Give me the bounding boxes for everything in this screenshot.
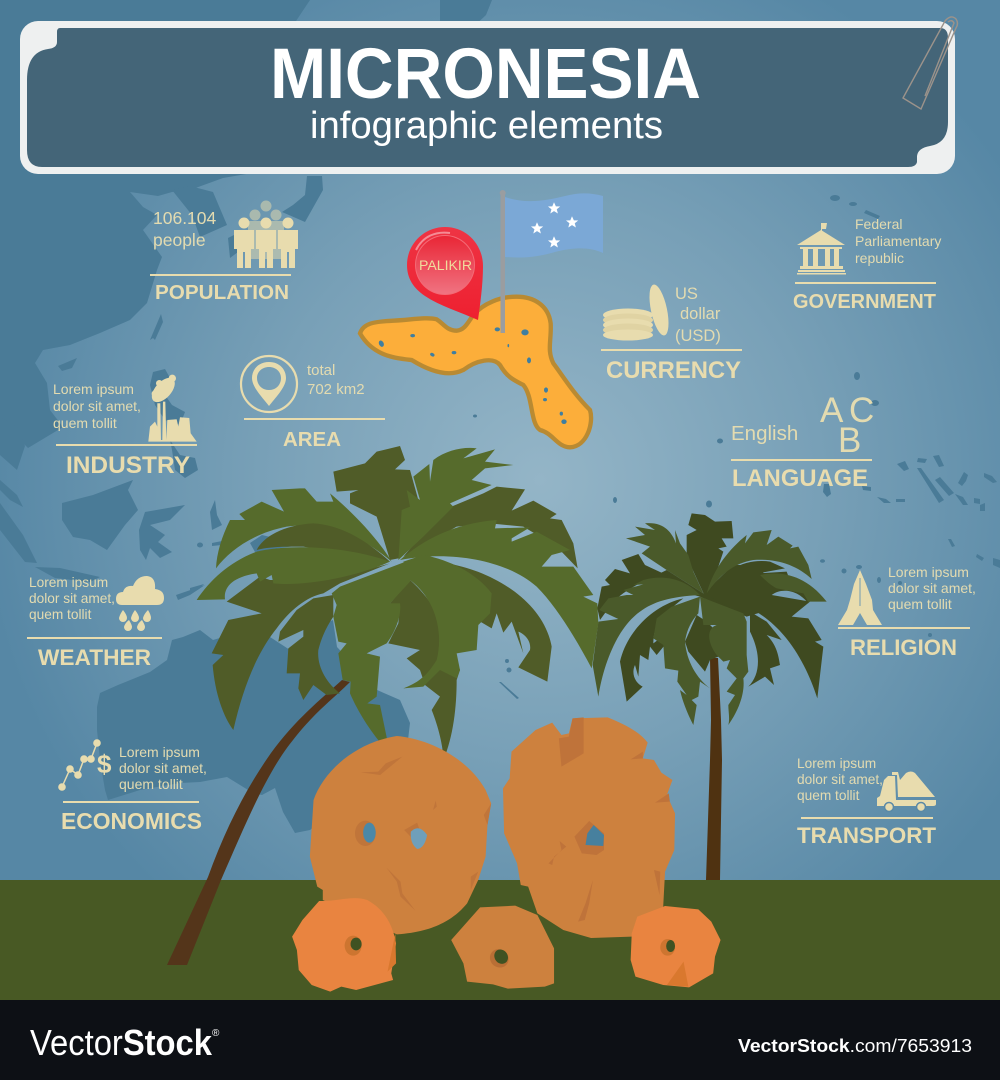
flag cloth: [505, 193, 603, 257]
weather text: Lorem ipsum: [29, 575, 108, 590]
transport block: [797, 756, 936, 848]
currency block: [601, 283, 742, 384]
currency label: CURRENCY: [606, 357, 741, 384]
religion text: dolor sit amet,: [888, 580, 976, 596]
ground: [0, 880, 1000, 1000]
flag on pole: [500, 190, 603, 333]
area text: total: [307, 362, 335, 379]
area text: 702 km2: [307, 381, 365, 398]
flag stars: [532, 203, 577, 247]
small palm fronds: [593, 513, 827, 725]
VectorStock image id: VectorStock .com/7653913: [738, 1036, 972, 1056]
economics text: dolor sit amet,: [119, 760, 207, 776]
stone: large right: [503, 717, 675, 938]
registered mark: ®: [212, 1028, 220, 1039]
icon: dump truck: [877, 772, 936, 812]
capital pin: [407, 227, 483, 320]
government text: Federal: [855, 216, 902, 232]
title banner: [20, 17, 958, 174]
currency text: US: [675, 285, 698, 303]
icon: letters ABC: [820, 391, 874, 460]
banner dark panel: [27, 28, 948, 167]
religion block: [838, 564, 976, 660]
world map silhouette: [0, 0, 1000, 833]
weather label: WEATHER: [38, 645, 151, 670]
large palm tree: [167, 446, 598, 965]
currency text: dollar: [680, 305, 721, 323]
industry text: dolor sit amet,: [53, 398, 141, 414]
transport text: dolor sit amet,: [797, 772, 883, 787]
religion text: Lorem ipsum: [888, 564, 969, 580]
language text: English: [731, 422, 798, 445]
economics text: quem tollit: [119, 776, 183, 792]
pin body: [407, 227, 483, 320]
icon: paperclip: [903, 17, 958, 109]
title text: MICRONESIA: [270, 35, 701, 114]
icon: letters ABC: B: [838, 421, 861, 460]
economics block: [58, 739, 207, 834]
religion text: quem tollit: [888, 596, 952, 612]
large palm trunk: [167, 680, 350, 965]
population block: [150, 200, 298, 304]
religion label: RELIGION: [850, 635, 957, 660]
stone: small left: [292, 898, 396, 992]
icon: praying hands: [838, 570, 882, 625]
weather text: dolor sit amet,: [29, 591, 115, 606]
icon: people: [234, 200, 298, 268]
banner white frame: [20, 21, 955, 174]
economics label: ECONOMICS: [61, 808, 202, 834]
stone: small middle: [451, 906, 554, 989]
icon: letters ABC: A: [820, 391, 844, 430]
government text: Parliamentary: [855, 233, 941, 249]
map of Micronesia island: [360, 297, 591, 447]
subtitle text: infographic elements: [310, 105, 663, 147]
industry label: INDUSTRY: [66, 452, 190, 479]
government text: republic: [855, 250, 904, 266]
small palm tree: [593, 513, 827, 880]
large palm fronds: [197, 446, 598, 760]
icon: rain cloud: [116, 576, 164, 631]
capital name: PALIKIR: [419, 257, 472, 273]
flag pole: [500, 193, 505, 333]
industry text: quem tollit: [53, 415, 117, 431]
transport text: Lorem ipsum: [797, 756, 876, 771]
area block: [241, 356, 385, 451]
icon: factory: [148, 374, 197, 442]
industry text: Lorem ipsum: [53, 381, 134, 397]
population unit: people: [153, 230, 206, 250]
currency text: (USD): [675, 327, 721, 345]
stone: small right: [631, 906, 721, 987]
icon: coins: [603, 283, 672, 340]
transport label: TRANSPORT: [797, 823, 936, 848]
economics text: Lorem ipsum: [119, 744, 200, 760]
transport text: quem tollit: [797, 788, 860, 803]
VectorStock logo text: VectorStock: [30, 1022, 213, 1063]
small palm trunk: [706, 658, 722, 880]
government block: [793, 216, 941, 313]
language label: LANGUAGE: [732, 465, 868, 492]
footer band: [0, 1000, 1000, 1080]
government label: GOVERNMENT: [793, 291, 936, 313]
population label: POPULATION: [155, 281, 289, 304]
icon: parliament building: [797, 223, 846, 274]
population figures: 106.104: [153, 208, 217, 228]
weather block: [27, 575, 164, 670]
icon: map pin in circle: [241, 356, 297, 412]
area label: AREA: [283, 428, 341, 451]
icon: letters ABC: C: [849, 391, 874, 430]
industry block: [53, 374, 197, 479]
weather text: quem tollit: [29, 607, 92, 622]
stone: large left: [310, 736, 491, 934]
language block: [731, 391, 874, 492]
stone money group: [292, 717, 721, 992]
icon: chart with dollar: $: [97, 749, 112, 779]
icon: chart with dollar: [58, 739, 112, 791]
